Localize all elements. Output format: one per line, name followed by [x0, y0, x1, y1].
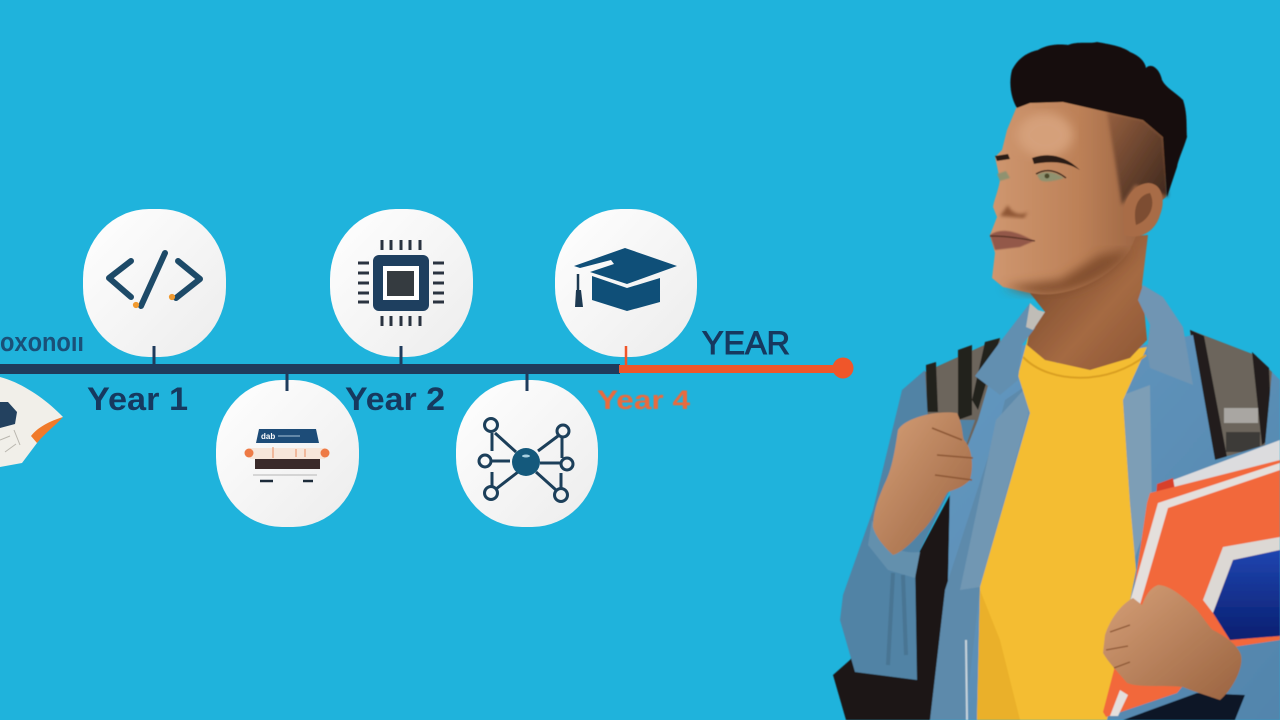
label: YEAR: YEAR [702, 325, 790, 361]
face glow [1017, 113, 1073, 157]
gripping hand [1103, 585, 1241, 700]
milestone: graduation cap bubble [555, 209, 697, 357]
icon: bus panel [244, 429, 330, 481]
left sleeve [840, 370, 975, 680]
left placket [930, 383, 1030, 720]
eyebrows [995, 154, 1080, 170]
raised hand [873, 412, 973, 555]
folder white strip [1127, 463, 1280, 615]
blue book cover [1203, 537, 1280, 613]
folders [1103, 440, 1280, 720]
student photo illustration [833, 42, 1280, 720]
sleeve cuff [868, 520, 920, 578]
jacket torso [945, 335, 1280, 720]
bag bottom [833, 495, 950, 720]
icon: code brackets [109, 253, 200, 307]
neckline collar shirt [1023, 355, 1146, 378]
red divider [1156, 478, 1175, 496]
label: Year 1: Year 1 [87, 381, 188, 417]
timeline [0, 358, 854, 378]
garbled label at left edge: oxonoıı [0, 327, 84, 357]
yellow shirt [977, 330, 1147, 720]
sleeve seam [888, 573, 906, 665]
neck [1027, 235, 1148, 370]
cropped illustration at left edge [0, 377, 63, 467]
eyes [997, 171, 1064, 181]
jacket collar right [1138, 285, 1193, 385]
milestone: chip icon bubble [330, 209, 473, 357]
nose shadow [1000, 205, 1028, 218]
icon: graduation cap [574, 248, 677, 311]
milestone: vehicle icon bubble [216, 380, 359, 527]
timeline end dot [832, 358, 854, 378]
shirt shade [977, 590, 1020, 720]
head [990, 42, 1187, 294]
jaw shadow [1003, 250, 1130, 294]
blue book [1213, 550, 1280, 640]
milestone: code icon bubble [83, 209, 226, 357]
white page stack [1158, 440, 1280, 503]
book shadow [1123, 693, 1245, 720]
ear [1123, 183, 1163, 236]
shaved side [1107, 112, 1168, 205]
denim jacket [840, 335, 1280, 720]
label: Year 2: Year 2 [345, 381, 445, 417]
timeline bar: navy section [0, 364, 620, 374]
lips [990, 231, 1034, 250]
label: Year 4: Year 4 [597, 385, 690, 415]
right placket [1123, 385, 1152, 560]
icon: microchip [358, 240, 444, 326]
jacket collar left [975, 303, 1035, 395]
backpack [925, 330, 1272, 480]
milestone: network icon bubble [456, 380, 598, 527]
timeline ticks [154, 346, 626, 391]
icon: bus panel: dab [261, 432, 275, 441]
icon: network nodes [479, 418, 573, 502]
face [990, 100, 1166, 294]
orange folder [1103, 460, 1280, 717]
timeline bar: orange section [619, 365, 843, 373]
hair [1010, 42, 1187, 197]
